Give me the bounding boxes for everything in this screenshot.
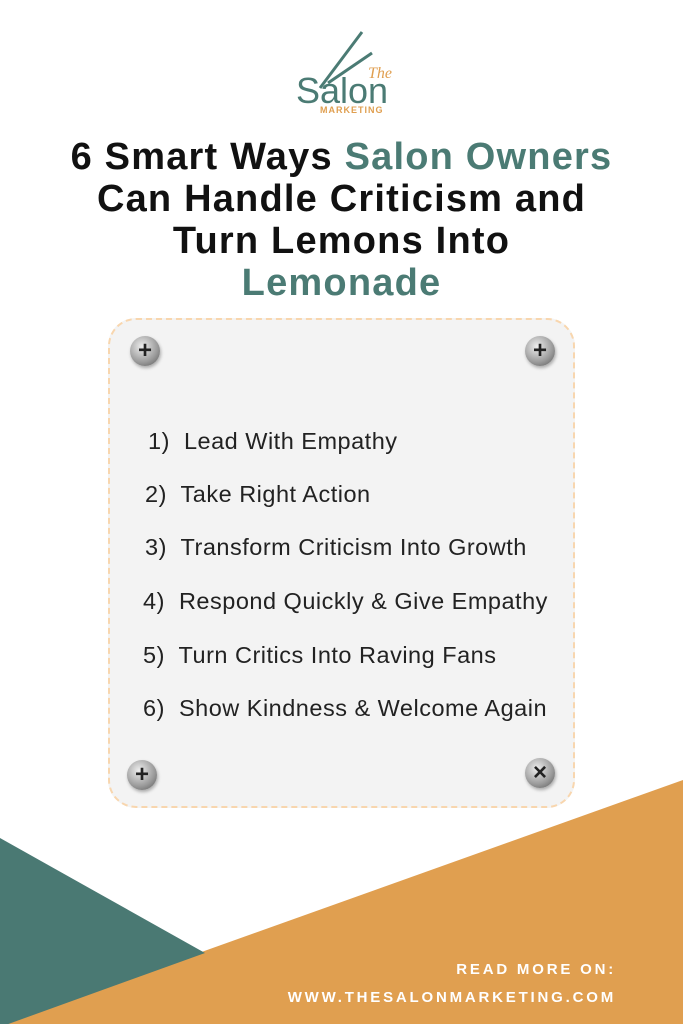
item 2: 2) Take Right Action <box>145 481 371 507</box>
logo <box>296 31 392 113</box>
title <box>71 136 612 304</box>
title: Turn Lemons Into <box>173 220 510 262</box>
item 6: 6) Show Kindness & Welcome Again <box>143 695 547 721</box>
logo: Salon <box>296 70 388 111</box>
footer text <box>288 961 616 1006</box>
item 5: 5) Turn Critics Into Raving Fans <box>143 642 496 668</box>
screw: + <box>533 337 547 364</box>
title: Lemonade <box>242 262 441 304</box>
screw: + <box>138 337 152 364</box>
title: 6 Smart Ways Salon Owners <box>71 136 612 178</box>
item 1: 1) Lead With Empathy <box>148 428 398 454</box>
title: Can Handle Criticism and <box>97 178 586 220</box>
screw <box>525 758 555 788</box>
footer text: WWW.THESALONMARKETING.COM <box>288 989 616 1006</box>
screw <box>127 760 157 790</box>
screw <box>525 336 555 366</box>
item 4: 4) Respond Quickly & Give Empathy <box>143 588 548 614</box>
screw: + <box>135 761 149 788</box>
screw: × <box>533 759 547 786</box>
footer text: READ MORE ON: <box>456 961 616 978</box>
item 3: 3) Transform Criticism Into Growth <box>145 534 527 560</box>
panel: list card <box>108 318 575 808</box>
screw <box>130 336 160 366</box>
logo: The <box>368 65 392 82</box>
